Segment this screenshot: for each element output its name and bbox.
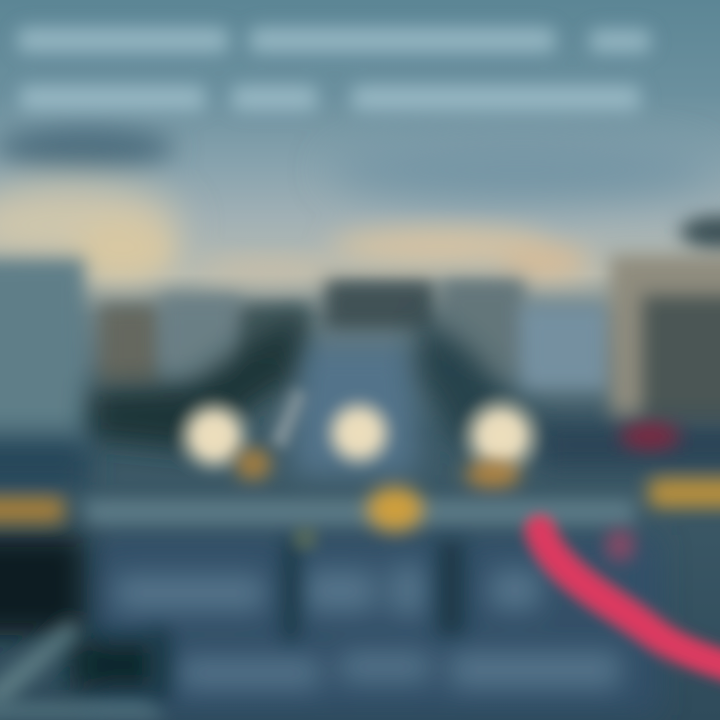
dark foreground left <box>0 535 160 720</box>
street lights <box>174 388 544 479</box>
lower street markings <box>115 565 620 688</box>
street and trees <box>0 315 720 715</box>
dark lane gaps <box>150 540 465 700</box>
red accents <box>540 422 720 675</box>
title: blurred headline <box>18 28 650 110</box>
amber accents <box>0 448 720 548</box>
skyline buildings <box>0 216 720 453</box>
clouds and sunset glow <box>0 128 710 282</box>
